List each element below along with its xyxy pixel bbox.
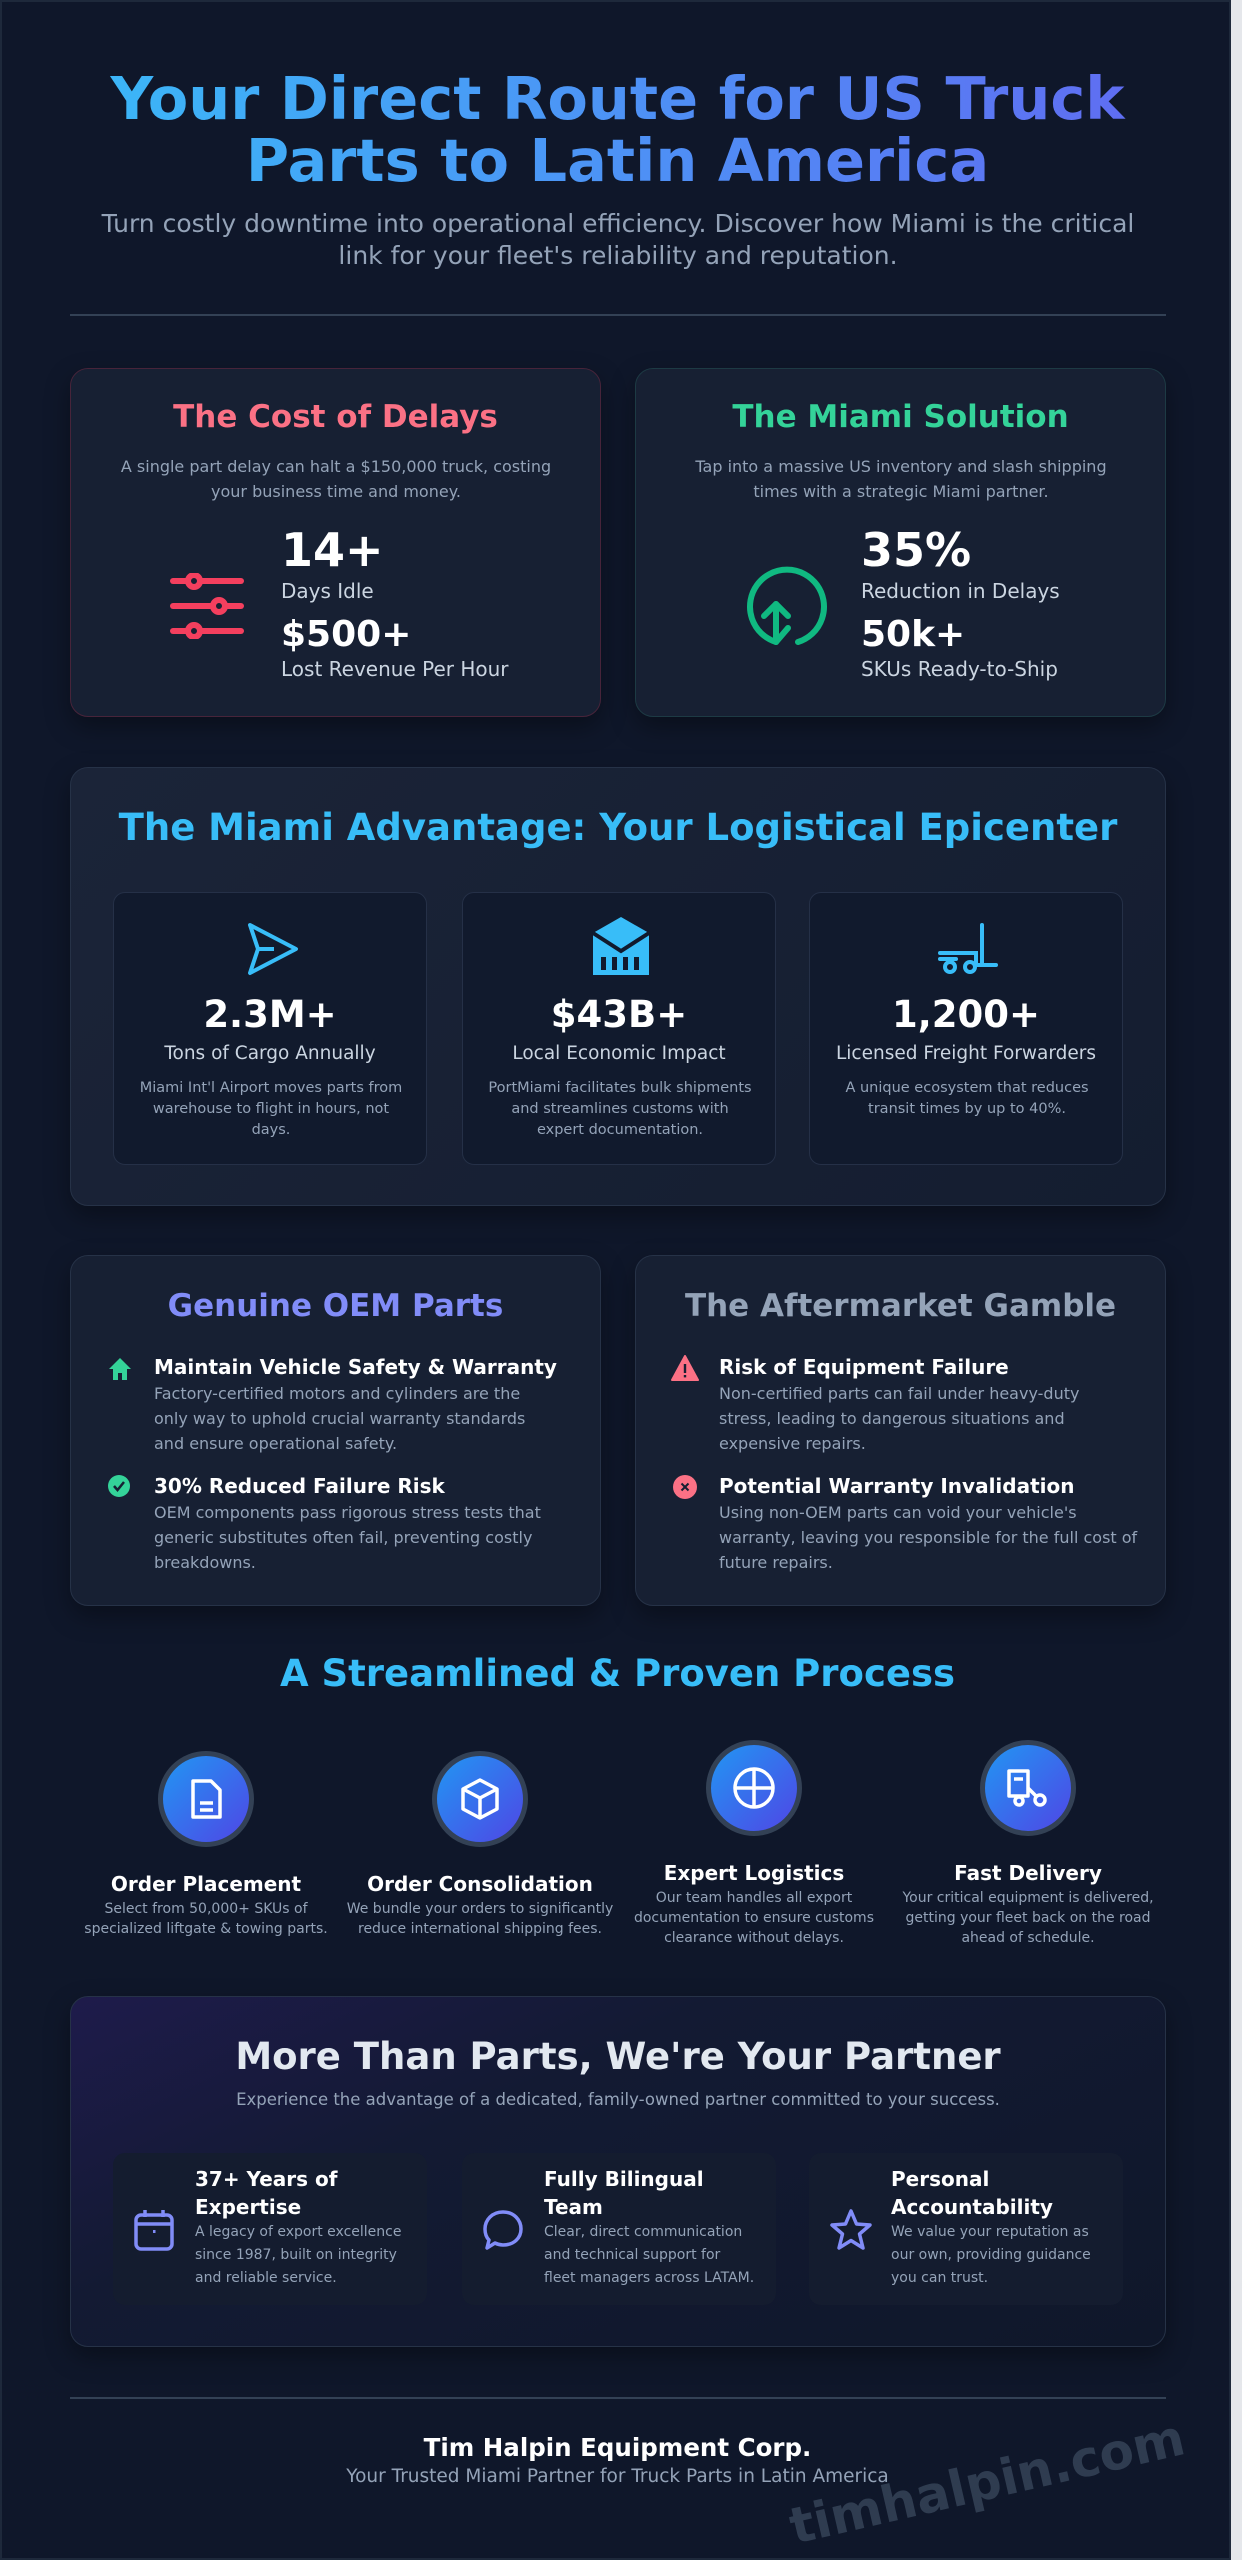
panel: cost of delays: [70, 368, 601, 717]
icon: chat bubble: [483, 2210, 523, 2250]
heading: The Aftermarket Gamble: [685, 1288, 1116, 1324]
card: port: Local Economic Impact: [512, 1043, 726, 1064]
stats: 35%: [861, 523, 971, 577]
text block: Tap into a massive US inventory and slash shipping times with a strategic Miami partner.: [695, 457, 1107, 501]
step: fast delivery: Your critical equipment is delivered, getting your fleet back on the road ahead of schedule.: [902, 1890, 1154, 1946]
item: failure risk: 30% Reduced Failure Risk: [154, 1474, 445, 1498]
icon: x circle: [673, 1475, 697, 1499]
item: safety: Maintain Vehicle Safety & Warranty: [154, 1355, 557, 1379]
card: expertise: [113, 2153, 427, 2305]
step: consolidation: [347, 1751, 613, 1937]
heading: Genuine OEM Parts: [168, 1288, 503, 1324]
step: order placement: [84, 1751, 328, 1937]
step: consolidation: We bundle your orders to significantly reduce international shipping fees.: [347, 1901, 613, 1937]
icon: document: [158, 1751, 254, 1847]
item: equipment failure: Non-certified parts can fail under heavy-duty stress, leading to dangerous situations and expensive repairs.: [719, 1384, 1079, 1453]
item: safety: [154, 1355, 557, 1453]
icon: globe: [706, 1740, 802, 1836]
card: expertise: 37+ Years of Expertise: [195, 2167, 337, 2219]
card: bilingual: Clear, direct communication and technical support for fleet managers across LATAM.: [544, 2224, 754, 2286]
heading: The Miami Advantage: Your Logistical Epicenter: [119, 806, 1117, 849]
title: [2, 68, 1233, 192]
step: order placement: Select from 50,000+ SKUs of specialized liftgate & towing parts.: [84, 1901, 328, 1937]
panel: miami solution: Reduction in Delays: [861, 579, 1060, 603]
card: accountability: We value your reputation as our own, providing guidance you can trust.: [891, 2224, 1091, 2286]
icon: warning: [671, 1355, 699, 1381]
heading: process: A Streamlined & Proven Process: [280, 1652, 955, 1695]
panel: cost of delays: Days Idle: [281, 579, 374, 603]
heading: The Cost of Delays: [173, 399, 498, 435]
footer: [346, 2433, 889, 2487]
panel: miami solution: SKUs Ready-to-Ship: [861, 657, 1058, 681]
panel: aftermarket: [635, 1255, 1166, 1606]
item: failure risk: OEM components pass rigorous stress tests that generic substitutes often fail, preventing costly breakdowns.: [154, 1503, 541, 1572]
item: safety: Factory-certified motors and cylinders are the only way to uphold crucial warranty standards and ensure operational safety.: [154, 1384, 525, 1453]
text block: A single part delay can halt a $150,000 truck, costing your business time and money.: [121, 457, 551, 501]
footer: Your Trusted Miami Partner for Truck Parts in Latin America: [346, 2466, 889, 2487]
icon: house: [109, 1358, 131, 1380]
footer: Tim Halpin Equipment Corp.: [424, 2433, 811, 2462]
card: expertise: A legacy of export excellence since 1987, built on integrity and reliable service.: [195, 2224, 401, 2286]
icon: box: [432, 1751, 528, 1847]
card: accountability: [809, 2153, 1123, 2305]
item: warranty invalidation: Using non-OEM parts can void your vehicle's warranty, leaving you responsible for the full cost of future repairs.: [719, 1503, 1137, 1572]
panel: miami advantage: [70, 767, 1166, 1206]
icon: circle arrow up: [747, 566, 827, 645]
card: forwarders: 1,200+: [892, 993, 1040, 1036]
subtitle: Turn costly downtime into operational efficiency. Discover how Miami is the critical link for your fleet's reliability and reputation.: [102, 209, 1134, 270]
heading: More Than Parts, We're Your Partner: [235, 2035, 1001, 2078]
panel: partner: [70, 1996, 1166, 2347]
heading: The Miami Solution: [732, 399, 1069, 435]
card: forwarders: Licensed Freight Forwarders: [836, 1043, 1096, 1064]
card: accountability: Personal Accountability: [891, 2167, 1053, 2219]
card: port: [462, 892, 776, 1165]
subtitle: Experience the advantage of a dedicated, family-owned partner committed to your success.: [236, 2090, 1000, 2109]
icon: forklift: [938, 923, 998, 974]
panel: miami solution: [635, 368, 1166, 717]
stats: 14+: [281, 523, 384, 577]
watermark: timhalpin.com: [784, 2408, 1190, 2556]
card: airport: Tons of Cargo Annually: [164, 1043, 376, 1064]
icon: paper plane: [248, 923, 298, 976]
step: fast delivery: Fast Delivery: [954, 1861, 1102, 1885]
icon: calendar: [134, 2210, 174, 2251]
step: expert logistics: Expert Logistics: [664, 1861, 844, 1885]
item: equipment failure: Risk of Equipment Failure: [719, 1355, 1009, 1379]
panel: cost of delays: $500+: [281, 614, 411, 655]
icon: sliders: [170, 573, 244, 639]
step: order placement: Order Placement: [111, 1872, 301, 1896]
step: consolidation: Order Consolidation: [367, 1872, 593, 1896]
icon: star: [830, 2209, 872, 2250]
card: port: PortMiami facilitates bulk shipments and streamlines customs with expert documentation.: [488, 1080, 752, 1138]
title: Your Direct Route for US Truck: [110, 64, 1125, 133]
card: bilingual: [462, 2153, 776, 2305]
icon: container: [593, 917, 649, 975]
step: expert logistics: [634, 1740, 874, 1946]
icon: check: [108, 1475, 130, 1497]
card: forwarders: A unique ecosystem that reduces transit times by up to 40%.: [845, 1080, 1089, 1117]
title: Parts to Latin America: [246, 126, 989, 195]
card: airport: [113, 892, 427, 1165]
step: fast delivery: [902, 1740, 1154, 1946]
icon: truck: [980, 1740, 1076, 1836]
card: bilingual: Fully Bilingual Team: [544, 2167, 704, 2219]
card: airport: 2.3M+: [203, 993, 337, 1036]
panel: miami solution: 50k+: [861, 614, 965, 655]
item: warranty invalidation: Potential Warranty Invalidation: [719, 1474, 1074, 1498]
panel: genuine OEM: [70, 1255, 601, 1606]
card: port: $43B+: [551, 993, 687, 1036]
card: airport: Miami Int'l Airport moves parts from warehouse to flight in hours, not days.: [140, 1080, 402, 1138]
step: expert logistics: Our team handles all export documentation to ensure customs clearance without delays.: [634, 1890, 874, 1946]
card: forwarders: [809, 892, 1123, 1165]
panel: cost of delays: Lost Revenue Per Hour: [281, 657, 509, 681]
